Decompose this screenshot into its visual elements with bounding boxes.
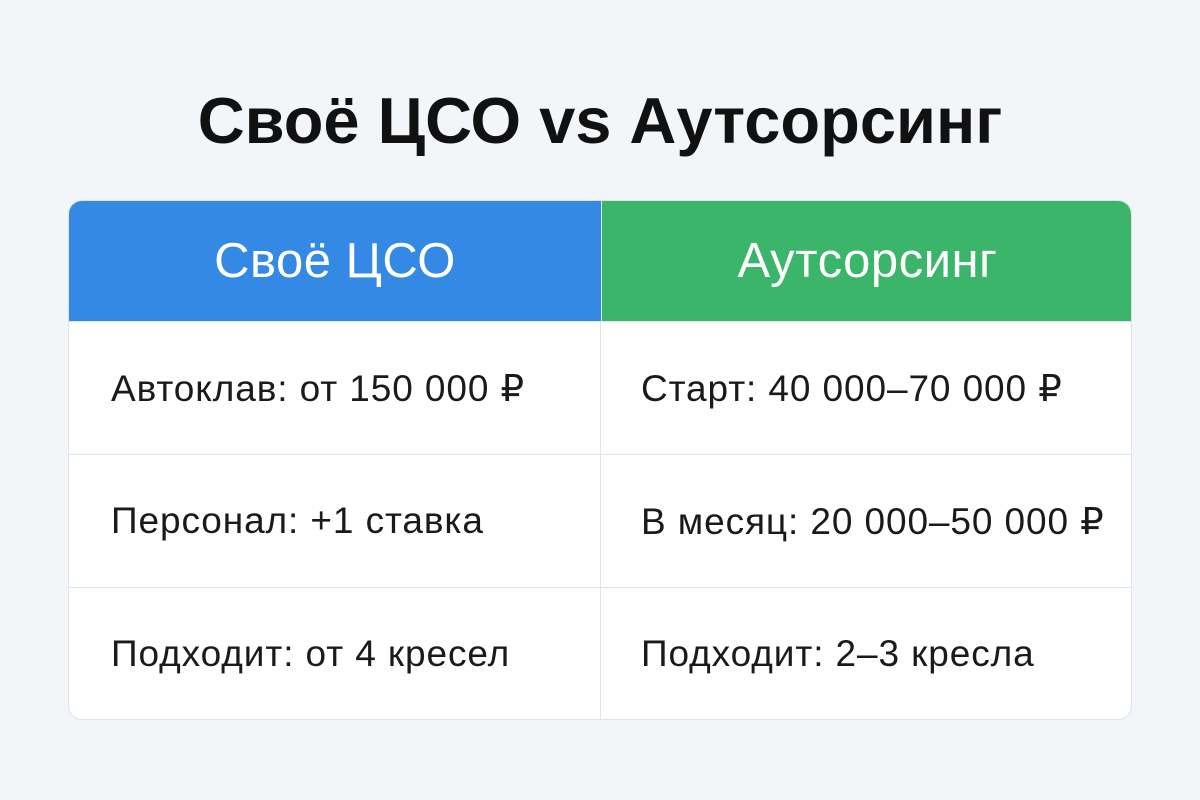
header: outsourcing: Аутсорсинг [738, 234, 997, 288]
row 3 left: Подходит: от 4 кресел [111, 633, 510, 674]
row 1 left: Автоклав: от 150 000 ₽ [111, 368, 525, 408]
row 3 right [601, 587, 1132, 720]
row 1 right [601, 321, 1132, 454]
comparison table [68, 200, 1132, 720]
row 2 left [69, 454, 600, 587]
row 1 right: Старт: 40 000–70 000 ₽ [641, 368, 1063, 408]
row 3 right: Подходит: 2–3 кресла [641, 633, 1035, 674]
header: outsourcing [601, 201, 1133, 321]
row 2 right [601, 454, 1132, 587]
row 2 right: В месяц: 20 000–50 000 ₽ [641, 500, 1105, 542]
row 1 left [69, 321, 600, 454]
row 2 left: Персонал: +1 ставка [111, 500, 484, 541]
header: own CSO [69, 201, 601, 321]
header: own CSO: Своё ЦСО [214, 234, 456, 288]
title: Своё ЦСО vs Аутсорсинг [198, 84, 1002, 157]
row 3 left [69, 587, 600, 720]
column divider [600, 321, 601, 721]
